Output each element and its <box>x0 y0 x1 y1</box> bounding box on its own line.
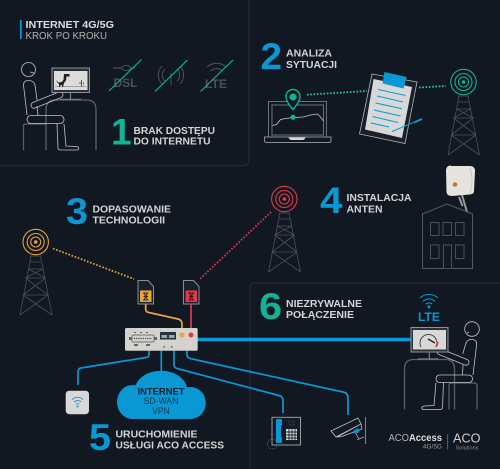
icon: internet cloud: INTERNET <box>138 386 185 396</box>
connection: router to monitor <box>197 338 412 341</box>
panel: step 6 frame <box>250 283 500 469</box>
icon: clipboard <box>360 72 422 144</box>
step 1 heading <box>111 111 215 152</box>
title <box>20 19 114 42</box>
connection: router to phone <box>174 350 283 413</box>
title: KROK PO KROKU <box>26 30 107 42</box>
logo: ACO Access: ACO <box>453 430 480 446</box>
step 6 heading: NIEZRYWALNE <box>286 298 362 310</box>
step 5 heading: USŁUGI ACO ACCESS <box>116 440 224 452</box>
icon: desk phone <box>268 417 300 449</box>
step 1 heading: BRAK DOSTĘPU <box>134 125 215 137</box>
dotted link: laptop to clipboard <box>307 91 367 95</box>
illustration: person with working internet <box>404 322 479 410</box>
icon: wifi access point <box>66 391 89 414</box>
icon: teal tower <box>448 69 480 155</box>
step 4 heading: ANTEN <box>346 204 382 216</box>
icon: LTE crossed out <box>200 60 233 92</box>
logo: ACO Access <box>388 430 480 452</box>
connection: red SIM to router <box>190 304 192 335</box>
step 1 heading: 1 <box>111 111 132 152</box>
icon: red tower <box>268 186 300 272</box>
icon: orange tower <box>20 229 52 315</box>
panel: step 1 frame <box>0 0 249 166</box>
step 6 heading: POŁĄCZENIE <box>286 309 354 321</box>
step 3 heading: 3 <box>66 191 88 232</box>
icon: DSL crossed out: DSL <box>114 76 138 90</box>
step 1 heading: DO INTERNETU <box>134 136 210 148</box>
step 6 heading: 6 <box>259 286 282 327</box>
connection: orange SIM to router <box>146 304 182 335</box>
step 5 heading: URUCHOMIENIE <box>116 428 198 440</box>
step 4 heading: 4 <box>320 180 343 221</box>
icon: LTE crossed out: LTE <box>205 77 227 91</box>
connection: router to cloud <box>160 350 162 375</box>
logo: ACO Access: Solutions <box>456 446 479 452</box>
icon: LTE signal <box>418 294 440 324</box>
step 3 heading <box>66 191 171 232</box>
icon: orange SIM card <box>138 280 154 304</box>
title: INTERNET 4G/5G <box>26 19 114 31</box>
step 4 heading <box>320 180 412 221</box>
icon: red SIM card <box>184 280 199 304</box>
icon: LTE signal: LTE <box>418 310 440 324</box>
icon: DSL crossed out <box>109 60 142 91</box>
connection: router to wifi <box>78 350 149 385</box>
step 2 heading: 2 <box>260 36 282 77</box>
dotted link: clipboard to tower <box>419 86 446 88</box>
logo: ACO Access: 4G/5G <box>423 444 442 450</box>
step 5 heading <box>89 417 224 458</box>
step 3 heading: DOPASOWANIE <box>92 203 171 215</box>
step 6 heading <box>259 286 362 327</box>
logo: ACO Access: ACOAccess <box>388 433 442 444</box>
step 5 heading: 5 <box>89 417 111 458</box>
dotted link: orange tower to SIM <box>53 248 134 279</box>
icon: house with antenna <box>422 166 475 268</box>
icon: security camera <box>331 417 366 444</box>
router <box>125 328 198 351</box>
icon: internet cloud: SD-WAN <box>144 396 178 406</box>
connection: router to camera <box>187 350 348 415</box>
step 3 heading: TECHNOLOGII <box>92 214 165 226</box>
step 4 heading: INSTALACJA <box>346 192 412 204</box>
icon: internet cloud <box>117 371 206 419</box>
icon: radio crossed out <box>155 60 188 92</box>
step 2 heading: ANALIZA <box>286 48 332 60</box>
icon: internet cloud: VPN <box>152 406 170 416</box>
step 2 heading: SYTUACJI <box>286 59 337 71</box>
dotted link: red tower to SIM <box>200 212 271 279</box>
icon: laptop with map pin <box>264 90 331 142</box>
step 2 heading <box>260 36 337 77</box>
illustration: person at computer without internet <box>22 62 96 150</box>
